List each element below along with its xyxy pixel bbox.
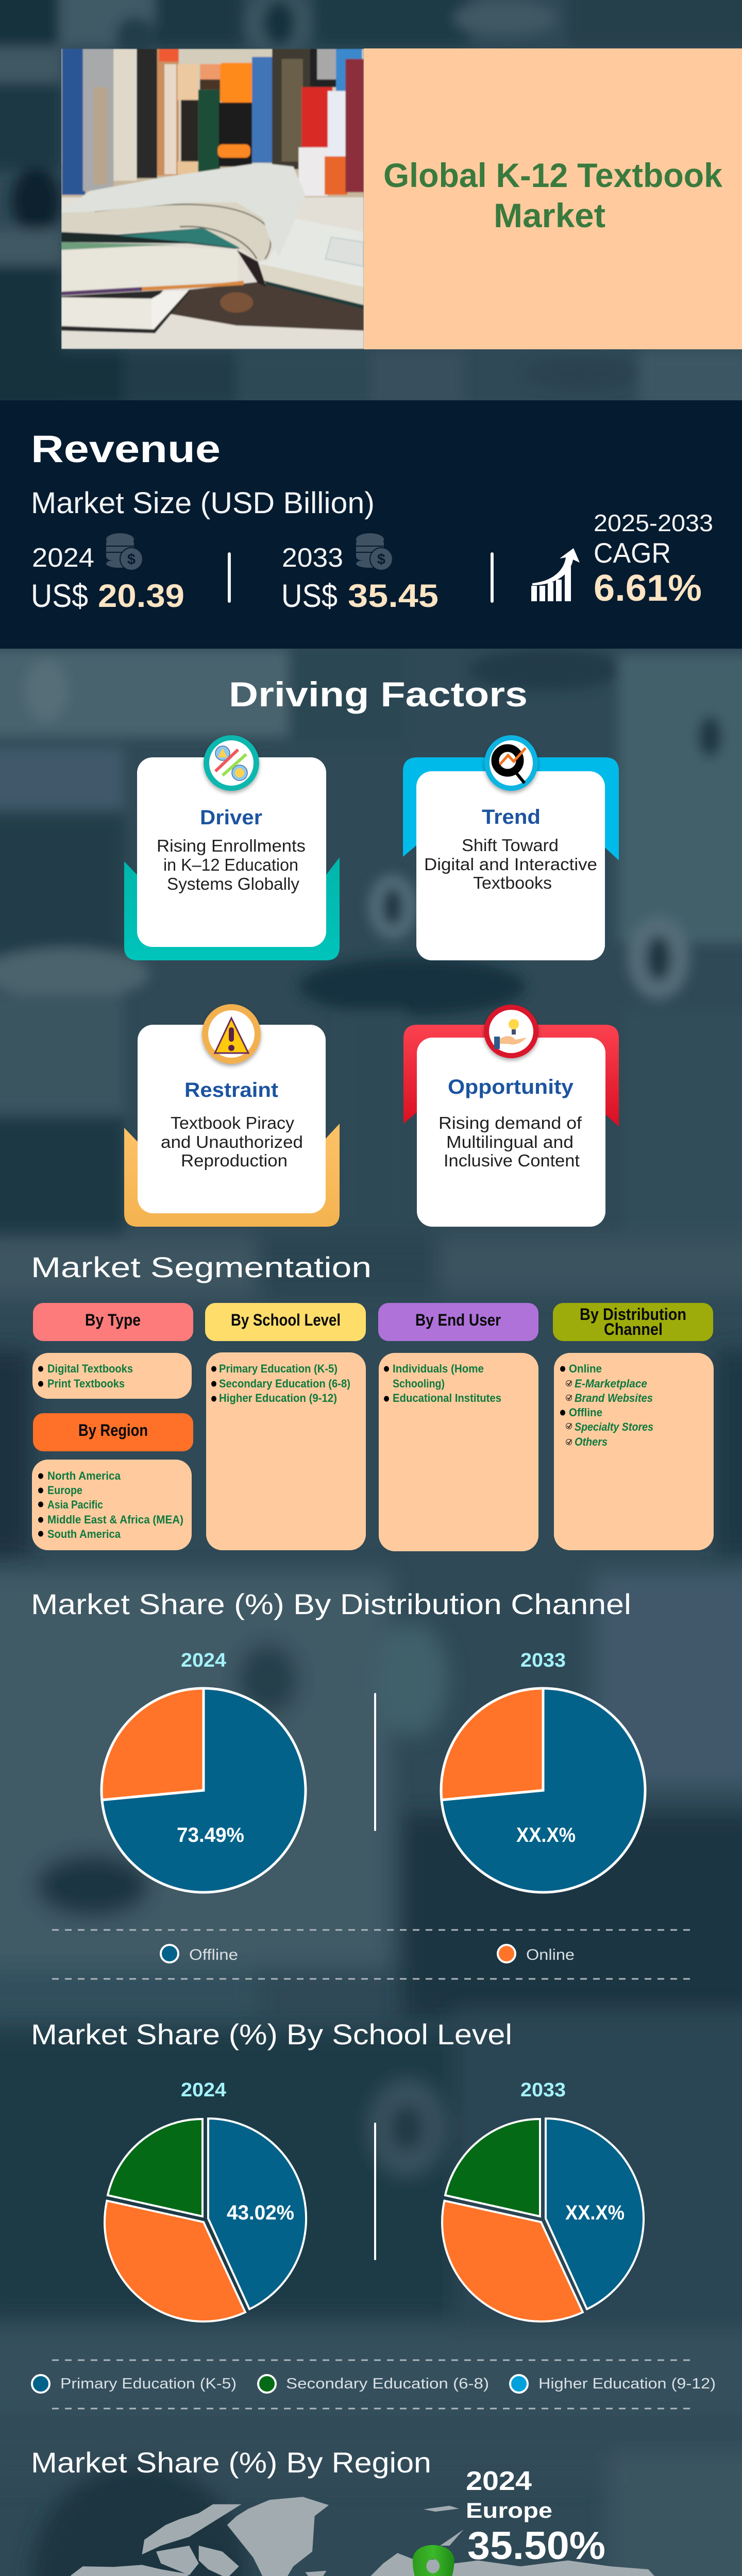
divider	[491, 552, 494, 603]
icon: opportunity	[484, 1005, 538, 1058]
pie chart: school level 2024	[105, 2079, 306, 2321]
panel: by type list: Digital Textbooks	[47, 1362, 133, 1375]
panel: by type list	[32, 1353, 192, 1399]
icon: growth chart with arrow	[531, 548, 580, 601]
driving factors area	[0, 649, 742, 1242]
panel: by distribution channel header: Channel	[604, 1320, 663, 1338]
panel: by type header: By Type	[85, 1311, 141, 1329]
pie chart: distribution 2033: XX.X%	[516, 1824, 576, 1846]
panel: opportunity	[403, 1005, 619, 1227]
panel: by end user list: Schooling)	[393, 1377, 445, 1390]
text: trend: Digital and Interactive	[424, 855, 597, 874]
stat: 2024 revenue: 2024	[32, 543, 94, 573]
stat: CAGR: 6.61%	[594, 568, 702, 609]
panel: by region list: North America	[47, 1469, 121, 1482]
panel: by region header	[33, 1413, 193, 1451]
text: trend: Shift Toward	[462, 836, 559, 855]
stat: CAGR	[594, 510, 713, 609]
panel: by type list: Print Textbooks	[47, 1377, 125, 1390]
panel: by distribution channel header: By Distribution	[580, 1305, 686, 1324]
panel: by distribution channel list: Brand Websites	[575, 1392, 653, 1404]
text: restraint: and Unauthorized	[161, 1132, 303, 1151]
text: market size: Market Size (USD Billion)	[31, 486, 375, 520]
divider	[374, 1693, 376, 1831]
pie chart: school level 2033: XX.X%	[565, 2201, 625, 2224]
legend: school level: Higher Education (9-12)	[538, 2376, 716, 2392]
callout: Europe 2024: Europe	[466, 2498, 552, 2522]
icon: coins 2033	[356, 533, 393, 570]
panel: by region list	[32, 1460, 192, 1550]
panel: by region header: By Region	[78, 1421, 148, 1439]
legend: distribution channel	[52, 1930, 695, 1979]
heading: market segmentation: Market Segmentation	[31, 1251, 372, 1283]
panel: by school level list	[206, 1352, 366, 1550]
legend: distribution channel: Online	[526, 1946, 575, 1963]
pie chart: distribution 2024: 73.49%	[177, 1824, 244, 1846]
heading: share by school level: Market Share (%) By School Level	[31, 2018, 512, 2050]
stat: CAGR: 2025-2033	[594, 510, 713, 536]
icon: trend	[484, 735, 538, 791]
panel: by school level header: By School Level	[231, 1311, 341, 1329]
icon: coins 2024: $	[127, 551, 136, 568]
title: Global K-12 Textbook	[383, 156, 722, 194]
title: Market	[494, 196, 605, 234]
panel: by distribution channel list: Online	[569, 1362, 602, 1375]
icon: driver	[204, 735, 259, 791]
text: opportunity	[439, 1113, 582, 1170]
pie chart: distribution 2024	[102, 1650, 306, 1892]
heading: share by distribution channel: Market Share (%) By Distribution Channel	[31, 1588, 631, 1620]
panel: restraint	[124, 1004, 340, 1227]
panel: by end user list: Individuals (Home	[393, 1362, 484, 1375]
panel: by end user header	[378, 1303, 538, 1341]
stat: 2024 revenue: 20.39	[98, 578, 184, 614]
panel: by region list: South America	[47, 1528, 121, 1540]
text: trend	[424, 836, 597, 892]
heading: share by region: Market Share (%) By Region	[31, 2446, 431, 2479]
stat: 2033 revenue: 2033	[282, 543, 343, 573]
panel: trend	[403, 735, 619, 960]
text: driver: Rising Enrollments	[157, 836, 306, 855]
panel: by school level list: Primary Education (K-5)	[219, 1362, 338, 1375]
panel: revenue	[0, 400, 742, 649]
world map	[71, 2497, 667, 2576]
divider	[228, 552, 231, 603]
callout: Europe 2024: 2024	[466, 2466, 532, 2496]
panel: by end user header: By End User	[415, 1311, 501, 1329]
text: driver	[157, 836, 306, 893]
panel: by distribution channel list: E-Marketplace	[575, 1377, 647, 1390]
legend: school level: Secondary Education (6-8)	[286, 2376, 489, 2392]
top area	[0, 0, 742, 410]
text: opportunity: Inclusive Content	[444, 1151, 580, 1170]
pie chart: school level 2024: 2024	[181, 2079, 226, 2101]
panel: by end user list: Educational Institutes	[393, 1392, 501, 1404]
panel: by end user list	[379, 1353, 538, 1551]
stat: 2033 revenue	[281, 543, 439, 614]
heading: driving factors: Driving Factors	[229, 675, 528, 714]
panel: driver	[124, 735, 340, 960]
share by region area	[0, 2421, 742, 2576]
text: restraint	[161, 1113, 303, 1170]
text: driver: Systems Globally	[167, 874, 299, 893]
pie chart: school level 2024: 43.02%	[227, 2201, 294, 2224]
pie chart: school level 2033: 2033	[520, 2079, 566, 2101]
panel: by type header	[33, 1303, 193, 1341]
share by distribution area	[0, 1571, 742, 2020]
legend: school level	[32, 2360, 716, 2409]
pie chart: distribution 2024: 2024	[181, 1650, 226, 1671]
panel: by school level header	[205, 1303, 366, 1341]
stat: 2024 revenue	[31, 543, 184, 614]
icon: restraint	[202, 1004, 261, 1064]
heading: opportunity: Opportunity	[448, 1076, 574, 1098]
panel: by distribution channel header	[553, 1303, 713, 1341]
heading: revenue: Revenue	[31, 428, 221, 470]
panel: title background	[364, 48, 742, 349]
segmentation area	[0, 1236, 742, 1556]
text: restraint: Textbook Piracy	[171, 1113, 295, 1132]
text: restraint: Reproduction	[181, 1151, 288, 1170]
stat: CAGR: CAGR	[594, 537, 671, 569]
stat: 2033 revenue: 35.45	[348, 578, 439, 614]
heading: restraint: Restraint	[184, 1079, 278, 1101]
title	[383, 156, 722, 234]
heading: driver: Driver	[200, 806, 262, 829]
text: opportunity: Multilingual and	[446, 1132, 574, 1151]
share by school level area	[0, 2009, 742, 2421]
heading: trend: Trend	[482, 806, 541, 828]
icon: coins 2024	[106, 533, 143, 570]
panel: by region list: Europe	[47, 1484, 82, 1497]
legend: distribution channel: Offline	[189, 1946, 238, 1963]
panel: by region list: Middle East & Africa (MEA)	[47, 1513, 183, 1526]
stat: 2024 revenue: US$	[31, 578, 88, 614]
header: photo of open textbooks	[61, 48, 742, 349]
panel: by school level list: Secondary Education (6-8)	[219, 1377, 350, 1390]
panel: by distribution channel list: Specialty Stores	[575, 1420, 653, 1433]
text: trend: Textbooks	[473, 873, 552, 892]
pie chart: distribution 2033: 2033	[520, 1650, 566, 1671]
callout: Europe 2024: 35.50%	[467, 2524, 605, 2568]
callout: Europe 2024	[466, 2466, 605, 2568]
pie chart: school level 2033	[442, 2079, 644, 2321]
panel: by distribution channel list: Offline	[569, 1406, 602, 1419]
panel: by region list: Asia Pacific	[47, 1498, 103, 1511]
panel: by distribution channel list	[554, 1353, 714, 1550]
pie chart: distribution 2033	[441, 1650, 645, 1892]
divider	[374, 2123, 376, 2260]
stat: 2033 revenue: US$	[281, 578, 338, 614]
panel: by distribution channel list: Others	[575, 1435, 608, 1448]
text: opportunity: Rising demand of	[439, 1113, 582, 1132]
panel: by school level list: Higher Education (9-12)	[219, 1392, 337, 1404]
legend: school level: Primary Education (K-5)	[60, 2376, 237, 2392]
icon: coins 2033: $	[377, 551, 385, 568]
icon: pin europe	[413, 2545, 454, 2576]
text: driver: in K–12 Education	[163, 855, 298, 874]
